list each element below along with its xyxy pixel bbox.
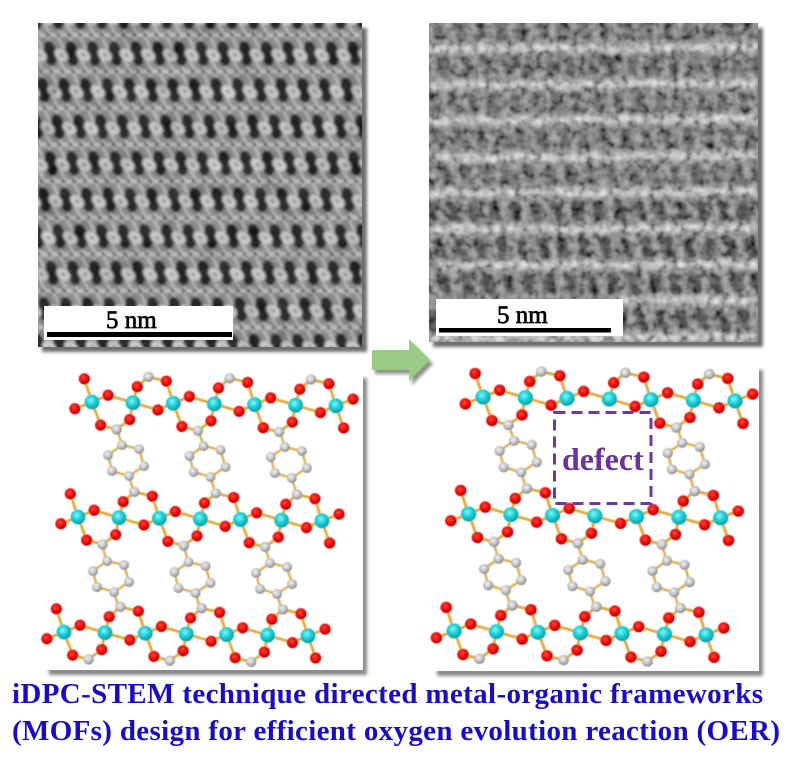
scale bar: left image	[44, 306, 233, 340]
panel: defective MOF STEM image	[415, 12, 765, 347]
title: iDPC-STEM technique directed metal-organic frameworks	[12, 678, 763, 710]
scale bar: right image	[436, 299, 623, 336]
title: (MOFs) design for efficient oxygen evolution reaction (OER)	[12, 715, 780, 747]
arrow: pristine to defective	[372, 339, 433, 385]
panel: pristine MOF STEM image	[38, 23, 370, 354]
scale bar: left image: 5 nm	[106, 307, 157, 334]
callout: defect box: defect	[562, 441, 644, 477]
scale bar: right image: 5 nm	[497, 302, 548, 329]
molecular model: pristine lattice	[41, 370, 359, 668]
panel: pristine MOF structure	[41, 370, 367, 675]
molecular model: lattice with missing linker	[430, 365, 759, 668]
panel: defective MOF structure	[430, 365, 763, 676]
callout: defect box	[554, 412, 651, 504]
title	[12, 678, 780, 747]
